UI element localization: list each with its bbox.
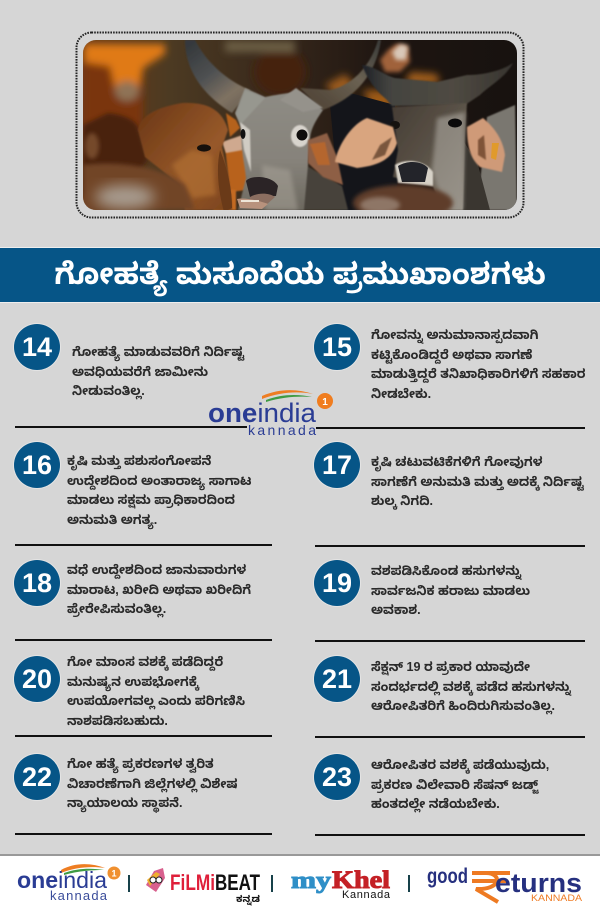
text 23 — [371, 758, 549, 813]
photo: cows in dotted frame — [76, 32, 524, 218]
text 15: ಗೋವನ್ನು ಅನುಮಾನಾಸ್ಪದವಾಗಿ — [371, 328, 539, 342]
text 14: ಗೋಹತ್ಯೆ ಮಾಡುವವರಿಗೆ ನಿರ್ದಿಷ್ಟ — [72, 345, 244, 359]
badge 18 — [14, 560, 60, 606]
text 21 — [371, 660, 572, 715]
footer logo: filmibeat: FiLMi — [170, 870, 215, 895]
watermark logo: oneindia kannada: kannada — [248, 422, 316, 438]
text 16 — [67, 454, 251, 530]
footer logo strip — [0, 854, 600, 909]
text 19: ವಶಪಡಿಸಿಕೊಂಡ ಹಸುಗಳನ್ನು — [371, 564, 521, 578]
badge 20 — [14, 656, 60, 702]
badge 16 — [14, 442, 60, 488]
badge 17: 17 — [322, 450, 352, 480]
footer logo: filmibeat: ಕನ್ನಡ — [236, 894, 261, 906]
right cow head — [392, 103, 467, 210]
badge 22 — [14, 754, 60, 800]
text 16: ಅನುಮತಿ ಅಗತ್ಯ. — [67, 513, 157, 527]
badge 21: 21 — [322, 664, 352, 694]
text 17 — [371, 455, 584, 510]
watermark logo: oneindia kannada: 1 — [322, 397, 328, 408]
text 22 — [67, 757, 237, 813]
badge 15 — [314, 324, 360, 370]
text 20: ನಾಶಪಡಿಸಬಹುದು. — [67, 714, 168, 728]
text 22: ಗೋ ಹತ್ಯೆ ಪ್ರಕರಣಗಳ ತ್ವರಿತ — [67, 757, 214, 771]
blurred foreground — [83, 164, 195, 210]
badge 14 — [14, 324, 60, 370]
badge 19 — [314, 560, 360, 606]
text 21: ಸೆಕ್ಷನ್ 19 ರ ಪ್ರಕಾರ ಯಾವುದೇ — [371, 660, 530, 674]
title banner — [0, 248, 600, 302]
footer logo: mykhel: Khel — [332, 867, 390, 894]
footer logo: goodreturns: good — [427, 865, 468, 888]
text 14 — [72, 345, 244, 400]
text 15: ಮಾಡುತ್ತಿದ್ದರೆ ತನಿಖಾಧಿಕಾರಿಗಳಿಗೆ ಸಹಕಾರ — [371, 367, 585, 381]
text 22: ವಿಚಾರಣೆಗಾಗಿ ಜಿಲ್ಲೆಗಳಲ್ಲಿ ವಿಶೇಷ — [67, 777, 237, 791]
right cow horns — [362, 63, 513, 106]
text 15 — [371, 328, 585, 401]
text 17: ಶುಲ್ಕ ನಿಗದಿ. — [371, 494, 433, 508]
footer logo: oneindia: kannada — [50, 888, 108, 903]
text 21: ಸಂದರ್ಭದಲ್ಲಿ ವಶಕ್ಕೆ ಪಡೆದ ಹಸುಗಳನ್ನು — [371, 680, 571, 694]
text 23: ಆರೋಪಿತರ ವಶಕ್ಕೆ ಪಡೆಯುವುದು, — [371, 758, 549, 772]
footer logo: mykhel: Kannada — [342, 889, 391, 901]
text 19: ಅವಕಾಶ. — [371, 603, 421, 617]
text 22: ನ್ಯಾಯಾಲಯ ಸ್ಥಾಪನೆ. — [67, 796, 182, 810]
footer logo: goodreturns: KANNADA — [531, 893, 582, 903]
text 18: ಪ್ರೇರೇಪಿಸುವಂತಿಲ್ಲ. — [67, 602, 166, 616]
dark gap and neck — [330, 93, 400, 210]
text 23: ಪ್ರಕರಣ ವಿಲೇವಾರಿ ಸೆಷನ್ ಜಡ್ಜ್ — [371, 778, 538, 792]
badge 23: 23 — [322, 762, 352, 792]
badge 16: 16 — [22, 450, 52, 480]
text 19: ಸಾರ್ವಜನಿಕ ಹರಾಜು ಮಾಡಲು — [371, 584, 530, 598]
right cow body — [477, 105, 517, 210]
footer logo: mykhel: my — [291, 868, 331, 894]
central grey cow head — [235, 88, 323, 210]
watermark logo: oneindia kannada — [208, 390, 333, 438]
footer logo: oneindia — [17, 864, 120, 903]
text 18: ವಧೆ ಉದ್ದೇಶದಿಂದ ಜಾನುವಾರುಗಳ — [67, 563, 246, 577]
text 15: ನೀಡಬೇಕು. — [371, 387, 431, 401]
text 15: ಕಟ್ಟಿಕೊಂಡಿದ್ದರೆ ಅಥವಾ ಸಾಗಣೆ — [371, 348, 532, 362]
central grey cow horns — [185, 40, 250, 113]
footer logo: oneindia: 1 — [111, 868, 117, 878]
text 14: ನೀಡುವಂತಿಲ್ಲ. — [72, 384, 145, 398]
text 16: ಕೃಷಿ ಮತ್ತು ಪಶುಸಂಗೋಪನೆ — [67, 454, 211, 468]
text 20 — [67, 655, 245, 728]
text 17: ಕೃಷಿ ಚಟುವಟಿಕೆಗಳಿಗೆ ಗೋವುಗಳ — [371, 455, 542, 469]
watermark logo: oneindia kannada: oneindia — [208, 398, 317, 428]
badge 23 — [314, 754, 360, 800]
badge 18: 18 — [22, 568, 52, 598]
badge 22: 22 — [22, 762, 52, 792]
text 19 — [371, 564, 530, 617]
title banner: ಗೋಹತ್ಯೆ ಮಸೂದೆಯ ಪ್ರಮುಖಾಂಶಗಳು — [54, 258, 546, 291]
footer logo: oneindia: oneindia — [17, 867, 107, 893]
blurred bottom head — [351, 182, 456, 210]
orange ear behind — [225, 147, 247, 192]
text 16: ಮಾಡಲು ಸಕ್ಷಮ ಪ್ರಾಧಿಕಾರದಿಂದ — [67, 493, 235, 507]
badge 15: 15 — [322, 332, 352, 362]
footer logo: mykhel — [291, 867, 391, 901]
background blurred cattle — [83, 41, 440, 132]
text 20: ಉಪಯೋಗವಲ್ಲ ಎಂದು ಪರಿಗಣಿಸಿ — [67, 694, 245, 708]
text 16: ಉದ್ದೇಶದಿಂದ ಅಂತಾರಾಜ್ಯ ಸಾಗಾಟ — [67, 474, 251, 488]
badge 20: 20 — [22, 664, 52, 694]
badge 19: 19 — [322, 568, 352, 598]
text 18 — [67, 563, 251, 618]
text 14: ಅವಧಿಯವರೆಗೆ ಜಾಮೀನು — [72, 365, 208, 379]
footer logo: filmibeat — [146, 868, 261, 906]
badge 14: 14 — [22, 332, 52, 362]
footer logo: goodreturns — [427, 865, 582, 904]
text 17: ಸಾಗಣೆಗೆ ಅನುಮತಿ ಮತ್ತು ಅದಕ್ಕೆ ನಿರ್ದಿಷ್ಟ — [371, 475, 584, 489]
text 20: ಮನುಷ್ಯನ ಉಪಭೋಗಕ್ಕೆ — [67, 675, 199, 689]
badge 21 — [314, 656, 360, 702]
text 20: ಗೋ ಮಾಂಸ ವಶಕ್ಕೆ ಪಡೆದಿದ್ದರೆ — [67, 655, 223, 669]
badge 17 — [314, 442, 360, 488]
text 18: ಮಾರಾಟ, ಖರೀದಿ ಅಥವಾ ಖರೀದಿಗೆ — [67, 583, 251, 597]
footer logo: goodreturns: eturns — [495, 868, 582, 898]
left brown cow — [83, 113, 148, 195]
text 21: ಆರೋಪಿತರಿಗೆ ಹಿಂದಿರುಗಿಸುವಂತಿಲ್ಲ. — [371, 699, 555, 713]
text 23: ಹಂತದಲ್ಲೇ ನಡೆಯಬೇಕು. — [371, 797, 500, 811]
